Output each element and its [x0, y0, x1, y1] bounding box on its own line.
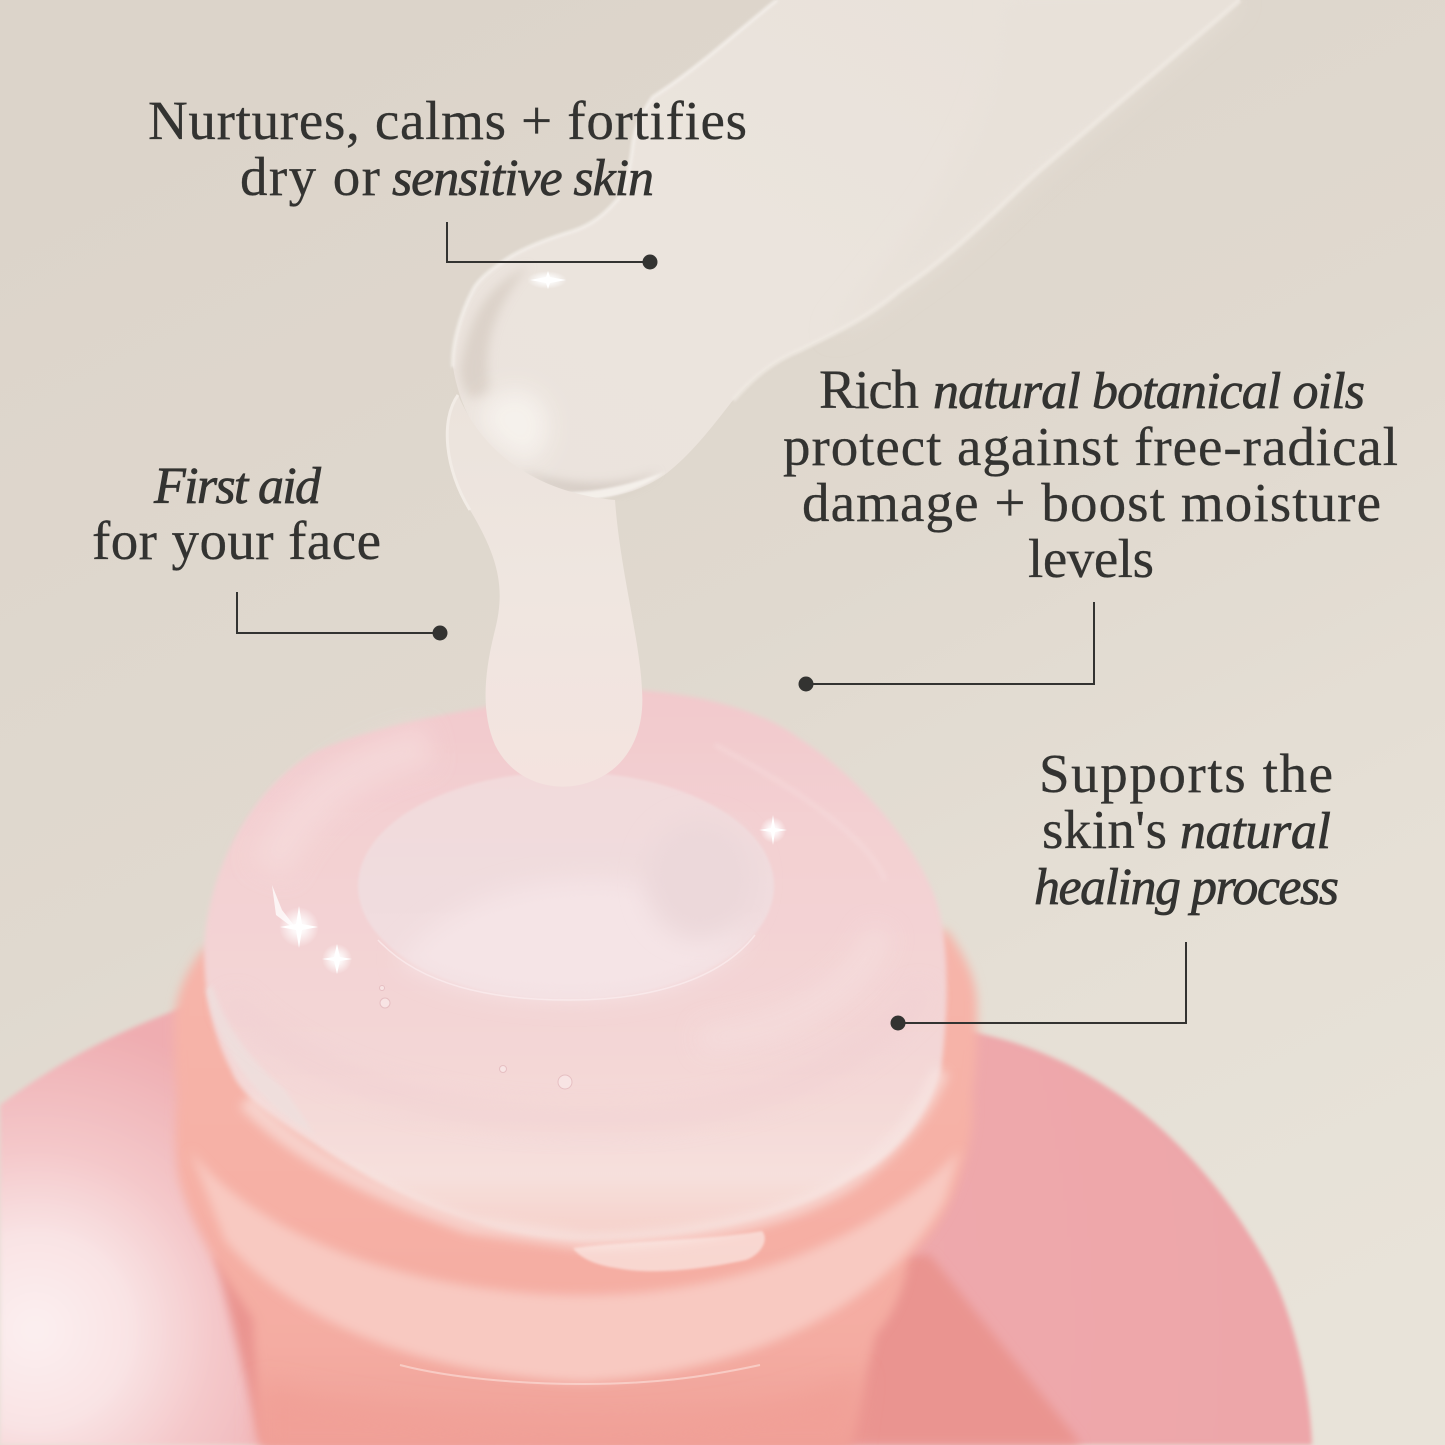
callout text: natural botanical oils	[933, 363, 1365, 420]
callout text: damage + boost moisture	[802, 472, 1381, 533]
dropper	[453, 0, 1240, 500]
inner well	[358, 772, 774, 1000]
callout text	[148, 90, 747, 207]
callout: nurtures	[148, 90, 747, 270]
callout text: Nurtures, calms + fortifies	[148, 90, 747, 151]
ring inner ridge	[715, 745, 885, 880]
callout text: skin's	[1042, 799, 1167, 860]
callout: first aid	[92, 458, 448, 640]
sparkles	[272, 271, 787, 1089]
gel cap	[204, 690, 947, 1271]
callout text: First aid	[153, 458, 322, 515]
callout text: dry or	[240, 146, 380, 207]
gel drip	[447, 395, 642, 787]
leader line	[237, 592, 448, 640]
dropper edge highlight	[453, 0, 777, 367]
soft highlight in ring	[270, 745, 430, 870]
glass lip band	[190, 1150, 960, 1382]
leader line	[798, 602, 1094, 692]
sparkle: ring left	[272, 885, 319, 948]
callout text: healing process	[1034, 859, 1339, 916]
leader line	[447, 222, 658, 270]
glass bulb shading	[460, 265, 530, 398]
callout text	[1034, 743, 1339, 916]
callout text: Rich	[819, 359, 919, 420]
callout text: natural	[1180, 803, 1331, 860]
bottle shoulder disc	[0, 1005, 1312, 1445]
callout text: protect against free-radical	[783, 416, 1398, 477]
sparkle: dropper tip	[527, 271, 567, 289]
sparkle: ring right	[759, 815, 787, 845]
lower neck shadow	[262, 1375, 860, 1445]
callout text: sensitive skin	[392, 150, 654, 207]
bubbles	[380, 986, 572, 1089]
bottle neck	[174, 930, 977, 1445]
callout text: Supports the	[1039, 743, 1333, 804]
callout text	[783, 359, 1398, 589]
callout text: for your face	[92, 510, 381, 571]
callout text: levels	[1028, 528, 1154, 589]
callout: botanical oils	[783, 359, 1398, 692]
callout text	[92, 458, 381, 571]
callout: healing	[890, 743, 1339, 1030]
glass glare	[573, 1231, 765, 1271]
sparkle: ring left lower	[322, 944, 352, 974]
leader line	[890, 942, 1186, 1030]
glass frost at left	[206, 985, 315, 1135]
